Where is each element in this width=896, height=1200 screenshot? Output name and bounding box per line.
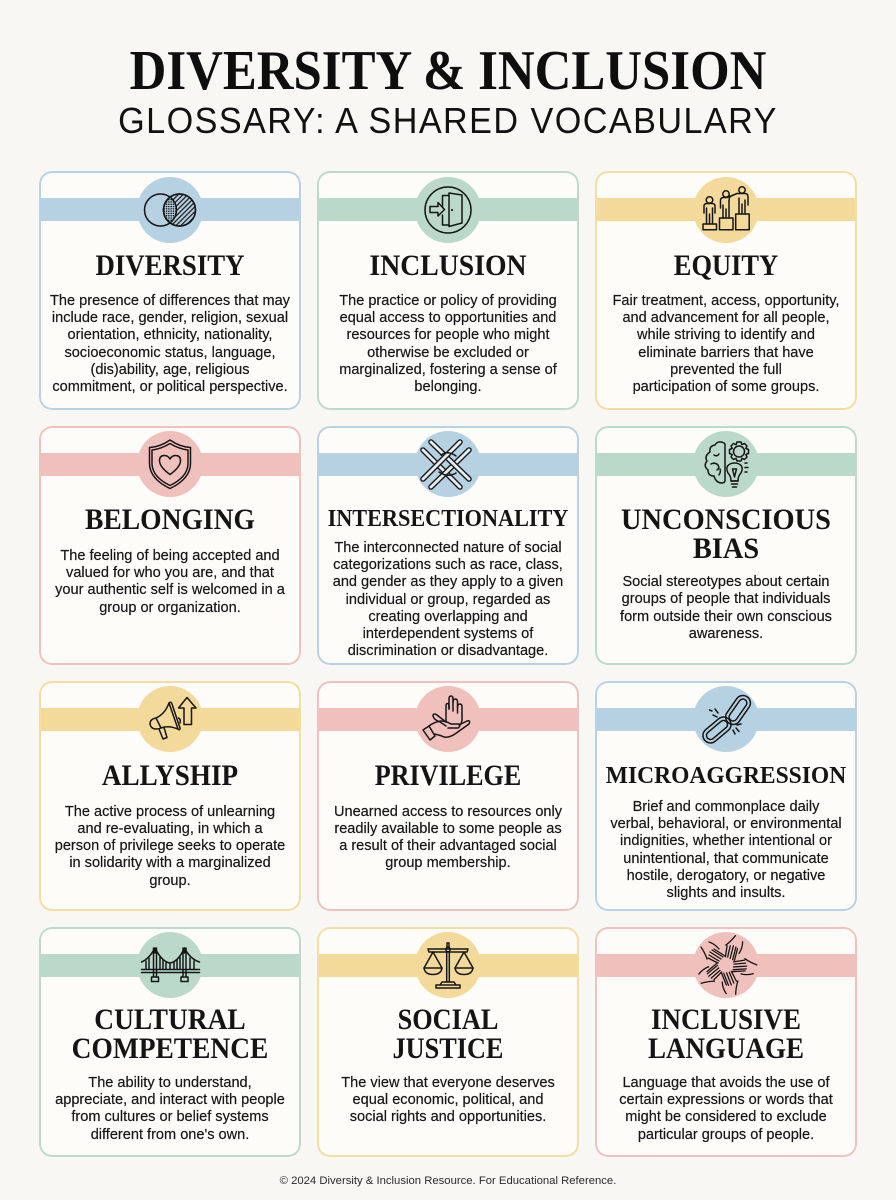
definition: and re-evaluating, in which a xyxy=(77,820,263,837)
heading: INCLUSIVE xyxy=(651,1004,801,1036)
definition: The ability to understand, xyxy=(88,1074,252,1091)
definition: Language that avoids the use of xyxy=(622,1074,830,1091)
definition: social rights and opportunities. xyxy=(350,1108,546,1125)
heading: COMPETENCE xyxy=(72,1033,268,1065)
icon: shield with heart xyxy=(137,430,203,496)
definition: particular groups of people. xyxy=(638,1126,814,1143)
definition: individual or group, regarded as xyxy=(346,590,550,608)
heading xyxy=(393,1004,503,1065)
definition xyxy=(341,1074,555,1125)
heading: INTERSECTIONALITY xyxy=(328,506,568,532)
heading: MICROAGGRESSION xyxy=(606,762,846,789)
definition xyxy=(333,539,563,659)
definition: readily available to some people as xyxy=(334,820,562,837)
definition: equal access to opportunities and xyxy=(340,309,556,326)
definition xyxy=(613,292,839,395)
definition: participation of some groups. xyxy=(633,378,819,395)
heading xyxy=(621,504,831,565)
definition xyxy=(620,573,832,642)
definition: valued for who you are, and that xyxy=(66,564,274,581)
panel: belonging xyxy=(39,426,301,665)
heading: SOCIAL xyxy=(398,1004,498,1036)
panel: diversity xyxy=(39,171,301,410)
definition: might be considered to exclude xyxy=(625,1108,827,1125)
definition: form outside their own conscious xyxy=(620,608,832,625)
definition: prevented the full xyxy=(670,361,782,378)
heading: BIAS xyxy=(693,533,759,565)
definition: marginalized, fostering a sense of xyxy=(339,361,557,378)
definition: a result of their advantaged social xyxy=(339,837,557,854)
definition: resources for people who might xyxy=(346,326,550,343)
heading: UNCONSCIOUS xyxy=(621,504,831,536)
heading: DIVERSITY xyxy=(95,250,245,282)
footer: © 2024 Diversity & Inclusion Resource. For Educational Reference. xyxy=(280,1175,616,1187)
definition: verbal, behavioral, or environmental xyxy=(610,815,842,832)
definition xyxy=(339,292,557,395)
definition: orientation, ethnicity, nationality, xyxy=(68,326,272,343)
definition: group or organization. xyxy=(99,599,241,616)
definition: Unearned access to resources only xyxy=(334,803,562,820)
icon: balance scales xyxy=(415,932,481,998)
definition xyxy=(55,803,285,889)
definition: and advancement for all people, xyxy=(622,309,830,326)
panel: allyship xyxy=(39,681,301,911)
definition xyxy=(619,1074,833,1143)
icon: venn diagram xyxy=(137,176,203,242)
heading: CULTURAL xyxy=(94,1004,246,1036)
definition: The feeling of being accepted and xyxy=(60,547,280,564)
definition: interdependent systems of xyxy=(363,625,533,642)
icon: suspension bridge xyxy=(137,932,203,998)
panel: intersectionality xyxy=(317,426,579,665)
definition xyxy=(610,798,842,901)
heading xyxy=(648,1004,804,1065)
definition: in solidarity with a marginalized xyxy=(69,854,271,871)
icon: raised hand over open hand xyxy=(415,686,481,752)
heading: LANGUAGE xyxy=(648,1033,804,1065)
definition: equal economic, political, and xyxy=(353,1091,543,1108)
heading xyxy=(72,1004,268,1065)
definition: while striving to identify and xyxy=(637,326,815,343)
definition: groups of people that individuals xyxy=(622,590,830,607)
definition xyxy=(50,292,290,395)
icon: door with arrow xyxy=(415,176,481,242)
definition: commitment, or political perspective. xyxy=(52,378,288,395)
definition: eliminate barriers that have xyxy=(638,344,814,361)
heading: INCLUSION xyxy=(369,250,527,282)
panel: microaggression xyxy=(595,681,857,911)
definition: from cultures or belief systems xyxy=(71,1108,269,1125)
definition: Social stereotypes about certain xyxy=(622,573,830,590)
definition: group. xyxy=(149,872,191,889)
heading: BELONGING xyxy=(85,504,255,536)
heading: PRIVILEGE xyxy=(375,760,521,792)
definition: appreciate, and interact with people xyxy=(55,1091,285,1108)
definition: and gender as they apply to a given xyxy=(333,573,563,590)
icon: megaphone and arrow xyxy=(137,686,203,752)
definition: awareness. xyxy=(689,625,763,642)
definition: (dis)ability, age, religious xyxy=(90,361,250,378)
definition: person of privilege seeks to operate xyxy=(55,837,285,854)
definition: group membership. xyxy=(385,854,511,871)
definition: indignities, whether intentional or xyxy=(620,832,832,849)
heading: ALLYSHIP xyxy=(102,760,238,792)
definition: otherwise be excluded or xyxy=(367,344,529,361)
definition: categorizations such as race, class, xyxy=(333,556,563,573)
definition: different from one's own. xyxy=(91,1126,249,1143)
title: DIVERSITY & INCLUSION xyxy=(130,40,766,102)
definition: your authentic self is welcomed in a xyxy=(55,581,285,598)
subtitle: GLOSSARY: A SHARED VOCABULARY xyxy=(118,100,778,141)
panel: cultural competence xyxy=(39,927,301,1157)
icon: woven strands xyxy=(415,430,481,496)
definition: hostile, derogatory, or negative xyxy=(627,867,825,884)
definition: creating overlapping and xyxy=(368,608,528,625)
panel: unconscious bias xyxy=(595,426,857,665)
definition: belonging. xyxy=(414,378,482,395)
definition: Fair treatment, access, opportunity, xyxy=(613,292,839,309)
definition: The view that everyone deserves xyxy=(341,1074,555,1091)
definition: The presence of differences that may xyxy=(50,292,290,309)
icon: circle of joined hands xyxy=(693,932,759,998)
definition: The interconnected nature of social xyxy=(334,539,562,556)
definition: The active process of unlearning xyxy=(65,803,275,820)
definition: Brief and commonplace daily xyxy=(633,798,819,815)
definition: socioeconomic status, language, xyxy=(64,344,276,361)
panel: inclusive language xyxy=(595,927,857,1157)
panel: privilege xyxy=(317,681,579,911)
definition: certain expressions or words that xyxy=(619,1091,833,1108)
panel: inclusion xyxy=(317,171,579,410)
definition xyxy=(55,1074,285,1143)
definition: discrimination or disadvantage. xyxy=(348,642,548,659)
icon: people on pedestals xyxy=(693,176,759,242)
definition: The practice or policy of providing xyxy=(339,292,557,309)
heading: EQUITY xyxy=(674,250,778,282)
icon: breaking chain xyxy=(693,686,759,752)
panel: equity xyxy=(595,171,857,410)
panel: social justice xyxy=(317,927,579,1157)
definition: unintentional, that communicate xyxy=(623,850,829,867)
heading: JUSTICE xyxy=(393,1033,503,1065)
definition xyxy=(55,547,285,616)
definition: include race, gender, religion, sexual xyxy=(52,309,288,326)
definition: slights and insults. xyxy=(667,884,785,901)
definition xyxy=(334,803,562,871)
icon: brain, gear and bulb xyxy=(693,430,759,496)
